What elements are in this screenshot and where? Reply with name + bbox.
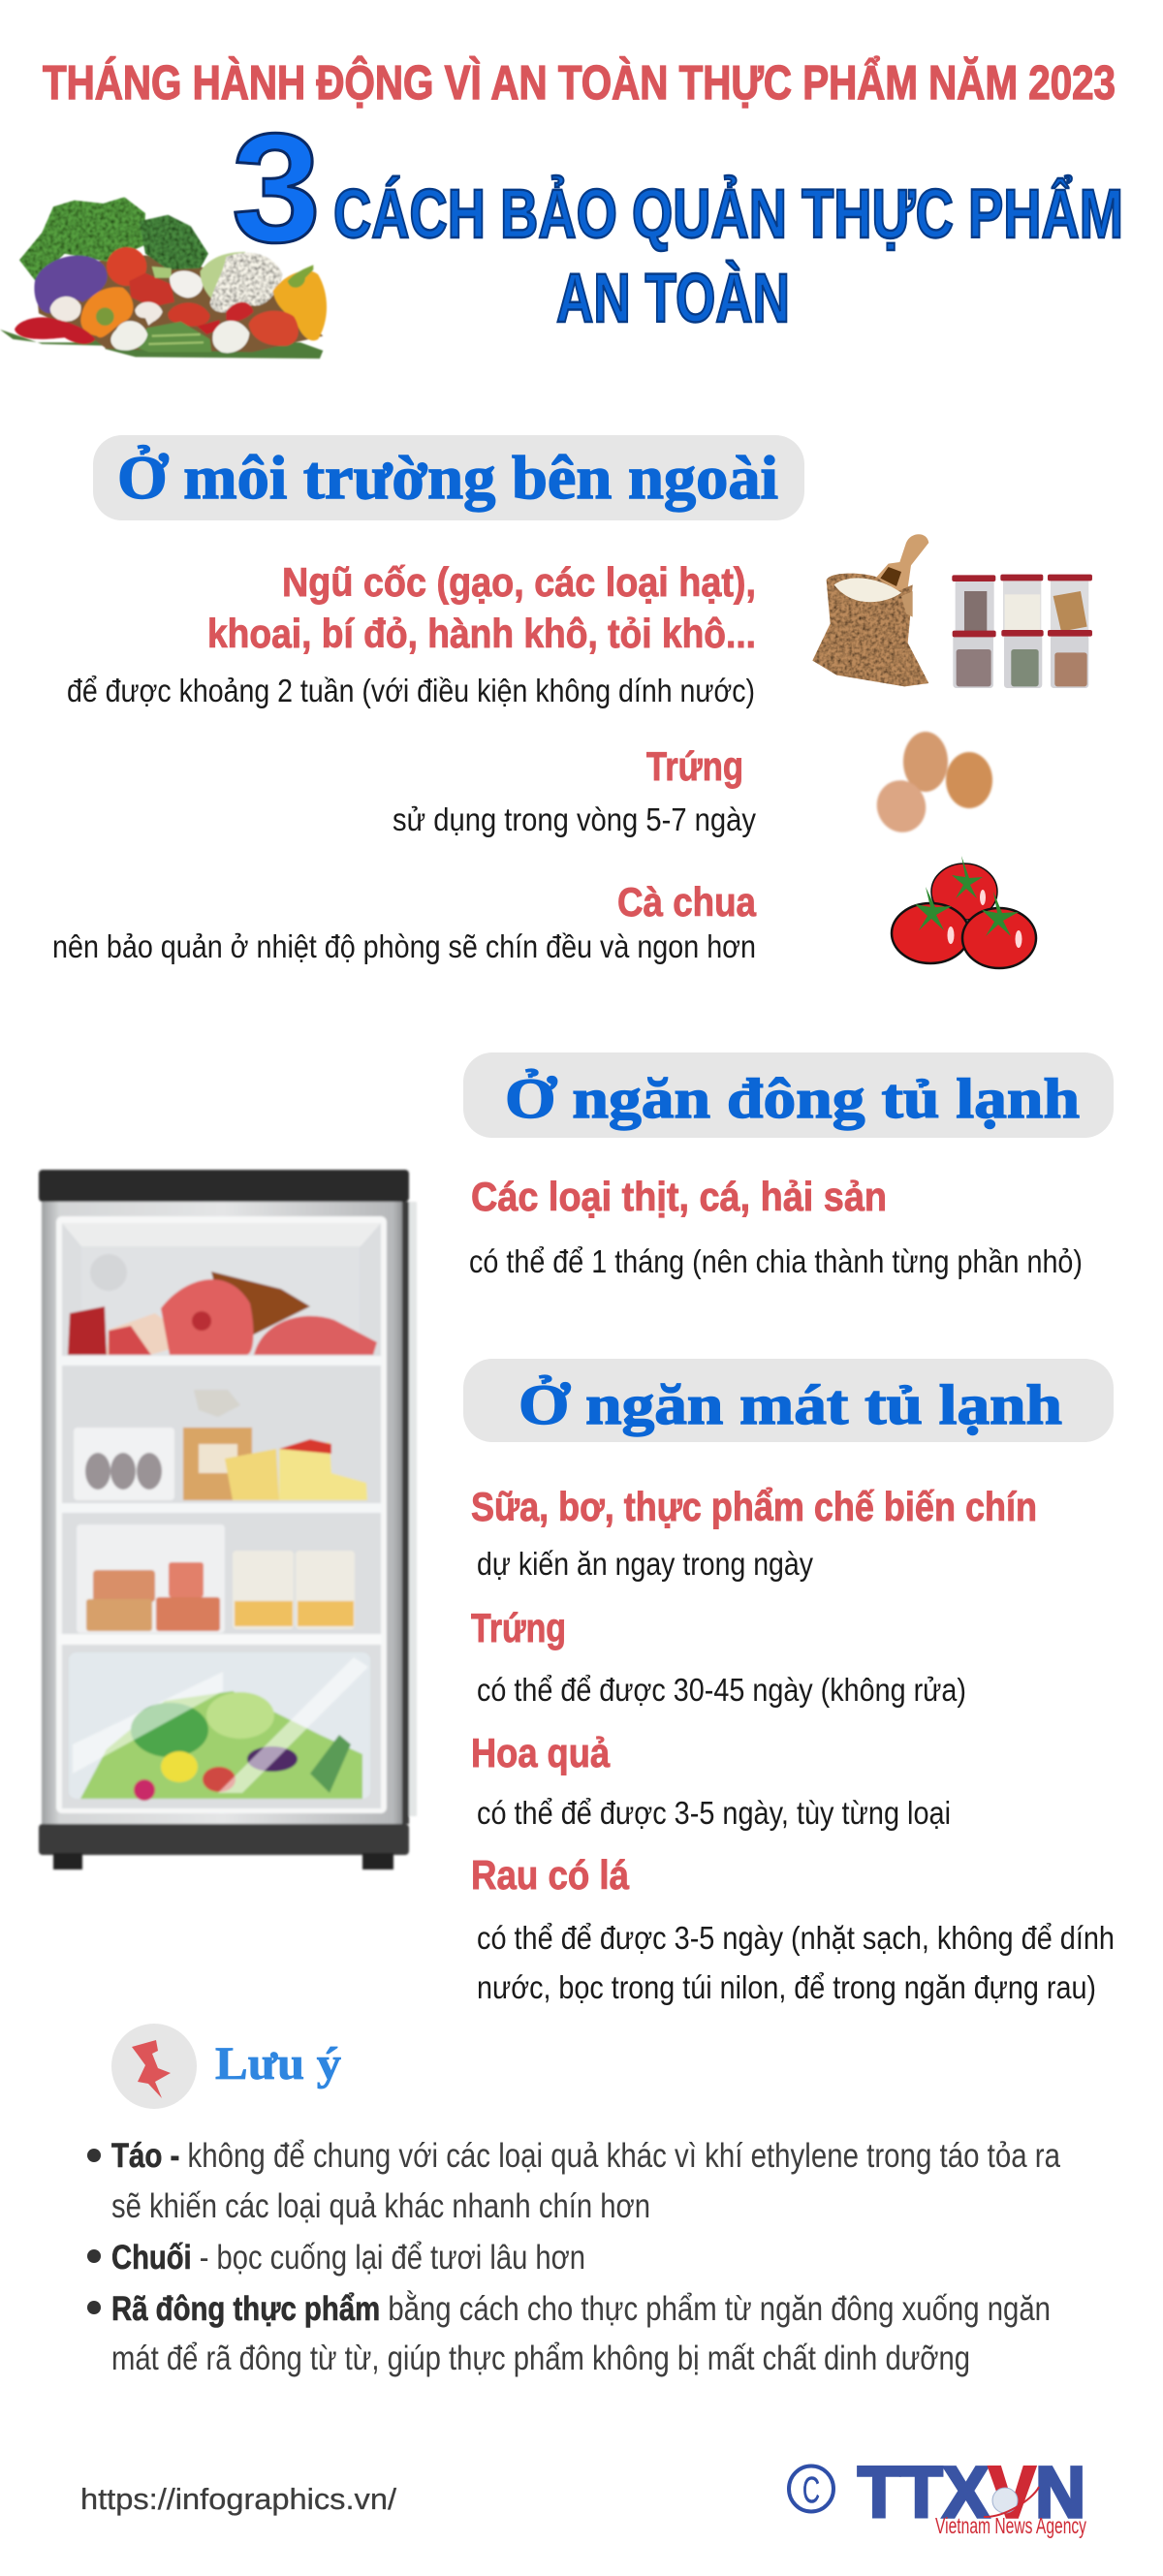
text block: leafy vegetables — [471, 1852, 1115, 2005]
text block: dairy — [471, 1484, 1037, 1582]
image: vegetables — [0, 197, 327, 359]
back tomato — [931, 864, 997, 920]
canned food — [77, 1524, 355, 1633]
text block: grains — [67, 559, 756, 708]
pill heading: Ở ngăn mát tủ lạnh — [519, 1373, 1062, 1436]
dairy heading: Sữa, bơ, thực phẩm chế biến chín — [471, 1484, 1037, 1529]
leafy heading: Rau có lá — [471, 1852, 630, 1898]
egg tray — [74, 1428, 174, 1500]
bullet: apples — [87, 2137, 1060, 2225]
logo tagline: Vietnam News Agency — [935, 2513, 1086, 2538]
pill heading: Ở môi trường bên ngoài — [117, 444, 778, 512]
stems and highlights — [915, 856, 1022, 948]
bullet: defrosting: mát để rã đông từ từ, giúp thực phẩm không bị mất chất dinh dưỡng — [111, 2340, 970, 2377]
tomato heading: Cà chua — [617, 879, 757, 925]
eggs heading: Trứng — [471, 1605, 566, 1650]
logo: TTXVN Vietnam News Agency — [858, 2452, 1086, 2538]
footer url: https://infographics.vn/ — [80, 2482, 396, 2516]
pill background — [93, 435, 804, 520]
side panel — [405, 1202, 417, 1816]
logo globe — [984, 2487, 1039, 2517]
vegetable drawer — [69, 1652, 370, 1801]
grains heading line 2: khoai, bí đỏ, hành khô, tỏi khô... — [207, 611, 756, 656]
note heading: Lưu ý — [215, 2038, 341, 2089]
pill background — [463, 1359, 1114, 1442]
pill heading: Ở ngăn đông tủ lạnh — [505, 1067, 1080, 1130]
section pill: outside environment — [93, 435, 804, 520]
text block: eggs — [393, 743, 756, 837]
fridge body — [42, 1200, 404, 1826]
heading: 3 ways to preserve food safely — [232, 101, 1123, 337]
grains description: để được khoảng 2 tuần (với điều kiện không dính nước) — [67, 673, 755, 708]
meat — [68, 1272, 377, 1355]
notes list — [87, 2137, 1060, 2377]
image: rice sack and storage jars — [812, 534, 1092, 688]
bottom band and feet — [39, 1824, 409, 1869]
heading line 2: AN TOÀN — [556, 261, 790, 337]
dairy description: dự kiến ăn ngay trong ngày — [477, 1546, 813, 1582]
image: refrigerator — [39, 1170, 417, 1869]
scoop — [875, 534, 928, 593]
copyright symbol: C — [802, 2470, 820, 2511]
image: three tomatoes — [892, 856, 1036, 968]
left tomato — [892, 903, 969, 963]
text block: eggs in fridge — [471, 1605, 966, 1708]
fruit heading: Hoa quả — [471, 1730, 611, 1775]
bullet: apples: sẽ khiến các loại quả khác nhanh chín hơn — [111, 2187, 650, 2225]
logo wordmark: TTXVN — [858, 2452, 1085, 2532]
interior — [56, 1216, 387, 1813]
sack — [812, 574, 928, 686]
top band — [39, 1170, 409, 1202]
bullet: defrosting: Rã đông thực phẩm bằng cách cho thực phẩm từ ngăn đông xuống ngăn — [111, 2290, 1051, 2328]
jars — [952, 575, 1092, 688]
right tomato — [962, 908, 1036, 968]
fruit description: có thể để được 3-5 ngày, tùy từng loại — [477, 1795, 951, 1831]
bread and cheese — [183, 1390, 367, 1500]
meat description: có thể để 1 tháng (nên chia thành từng phần nhỏ) — [469, 1243, 1083, 1279]
section pill: fridge compartment — [463, 1359, 1114, 1442]
icon: push pin — [111, 2024, 197, 2109]
text block: meat and fish — [469, 1174, 1083, 1279]
section pill: freezer — [463, 1052, 1114, 1138]
eggs description: có thể để được 30-45 ngày (không rửa) — [477, 1672, 966, 1708]
grains heading line 1: Ngũ cốc (gạo, các loại hạt), — [282, 559, 756, 605]
pin — [132, 2040, 171, 2098]
image: three eggs — [869, 732, 992, 839]
numeral 3: 3 — [232, 101, 321, 274]
text block: tomatoes — [52, 879, 757, 964]
eggs heading: Trứng — [646, 743, 743, 789]
pin circle — [111, 2024, 197, 2109]
eggs description: sử dụng trong vòng 5-7 ngày — [393, 801, 756, 837]
meat heading: Các loại thịt, cá, hải sản — [471, 1174, 887, 1219]
pill background — [463, 1052, 1114, 1138]
bullet: bananas: Chuối - bọc cuống lại để tươi lâu hơn — [111, 2239, 585, 2277]
shelves — [58, 1356, 382, 1645]
text block: fruit — [471, 1730, 951, 1831]
bullet: defrosting — [87, 2290, 1051, 2377]
copyright symbol — [789, 2466, 833, 2512]
tomato description: nên bảo quản ở nhiệt độ phòng sẽ chín đều và ngon hơn — [52, 928, 756, 964]
